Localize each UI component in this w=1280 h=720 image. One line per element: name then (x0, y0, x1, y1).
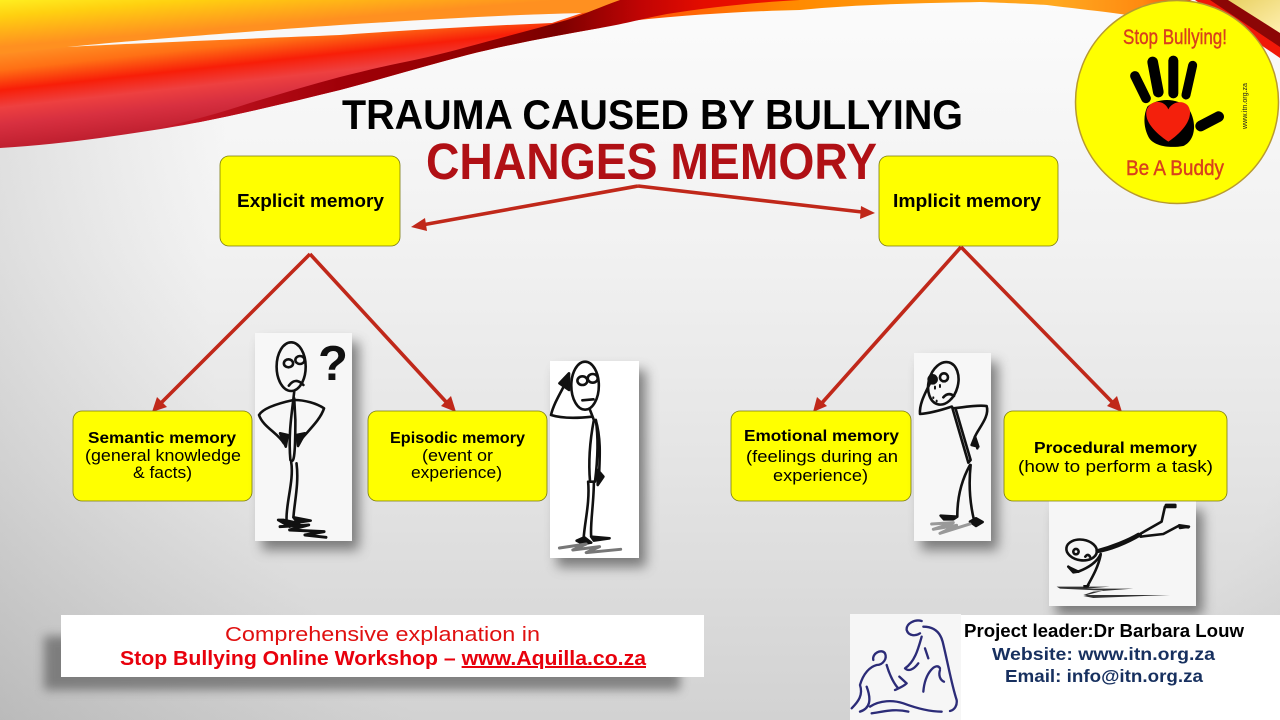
illustration: confused stick figure: ? (318, 337, 348, 391)
logo: Stop Bullying Be A Buddy badge: Be A Buddy (1126, 157, 1224, 180)
box: emotional memory: Emotional memory (744, 428, 899, 445)
box: emotional memory (731, 411, 911, 501)
box: episodic memory: experience) (411, 464, 502, 482)
illustration: falling stick figure (1049, 501, 1203, 615)
arrows from explicit memory to semantic and episodic (152, 254, 456, 412)
box: semantic memory: & facts) (133, 464, 192, 482)
box: episodic memory: (event or (422, 447, 494, 465)
box: explicit memory (220, 156, 400, 246)
callout: workshop reference (44, 615, 704, 690)
box: implicit memory (879, 156, 1058, 246)
box: semantic memory: Semantic memory (88, 430, 236, 447)
illustration: stick figure scratching head (550, 361, 646, 567)
title: CHANGES MEMORY (426, 133, 877, 190)
box: episodic memory (368, 411, 547, 501)
callout: workshop reference: Comprehensive explanation in (225, 624, 540, 646)
panel: project contact details (961, 615, 1280, 720)
box: emotional memory: experience) (773, 467, 868, 485)
illustration: confused stick figure (255, 333, 359, 550)
box: semantic memory: (general knowledge (85, 447, 241, 465)
decorative flame ribbon (0, 0, 1280, 148)
box: episodic memory: Episodic memory (390, 430, 525, 447)
box: procedural memory (1004, 411, 1227, 501)
logo: helping hand figures (850, 614, 961, 720)
logo: Stop Bullying Be A Buddy badge: Stop Bullying! (1123, 26, 1227, 49)
callout: workshop reference: Stop Bullying Online Workshop – www.Aquilla.co.za (120, 648, 647, 670)
box: explicit memory: Explicit memory (237, 191, 384, 211)
box: procedural memory: (how to perform a task) (1018, 458, 1213, 476)
box: procedural memory: Procedural memory (1034, 440, 1197, 457)
box: semantic memory (73, 411, 252, 501)
box: implicit memory: Implicit memory (893, 191, 1041, 211)
panel: project contact details: Project leader:Dr Barbara Louw (964, 620, 1245, 641)
illustration: crying stick figure (914, 353, 998, 550)
arrows from title to explicit and implicit memory (411, 186, 875, 231)
panel: project contact details: Website: www.itn.org.za (992, 644, 1215, 664)
logo: Stop Bullying Be A Buddy badge: www.itn.org.za (1242, 83, 1249, 130)
arrows from implicit memory to emotional and procedural (813, 247, 1122, 412)
title (342, 91, 963, 190)
title: TRAUMA CAUSED BY BULLYING (342, 91, 963, 138)
logo: Stop Bullying Be A Buddy badge (1076, 0, 1278, 204)
panel: project contact details: Email: info@itn.org.za (1005, 666, 1203, 686)
box: emotional memory: (feelings during an (746, 448, 898, 466)
